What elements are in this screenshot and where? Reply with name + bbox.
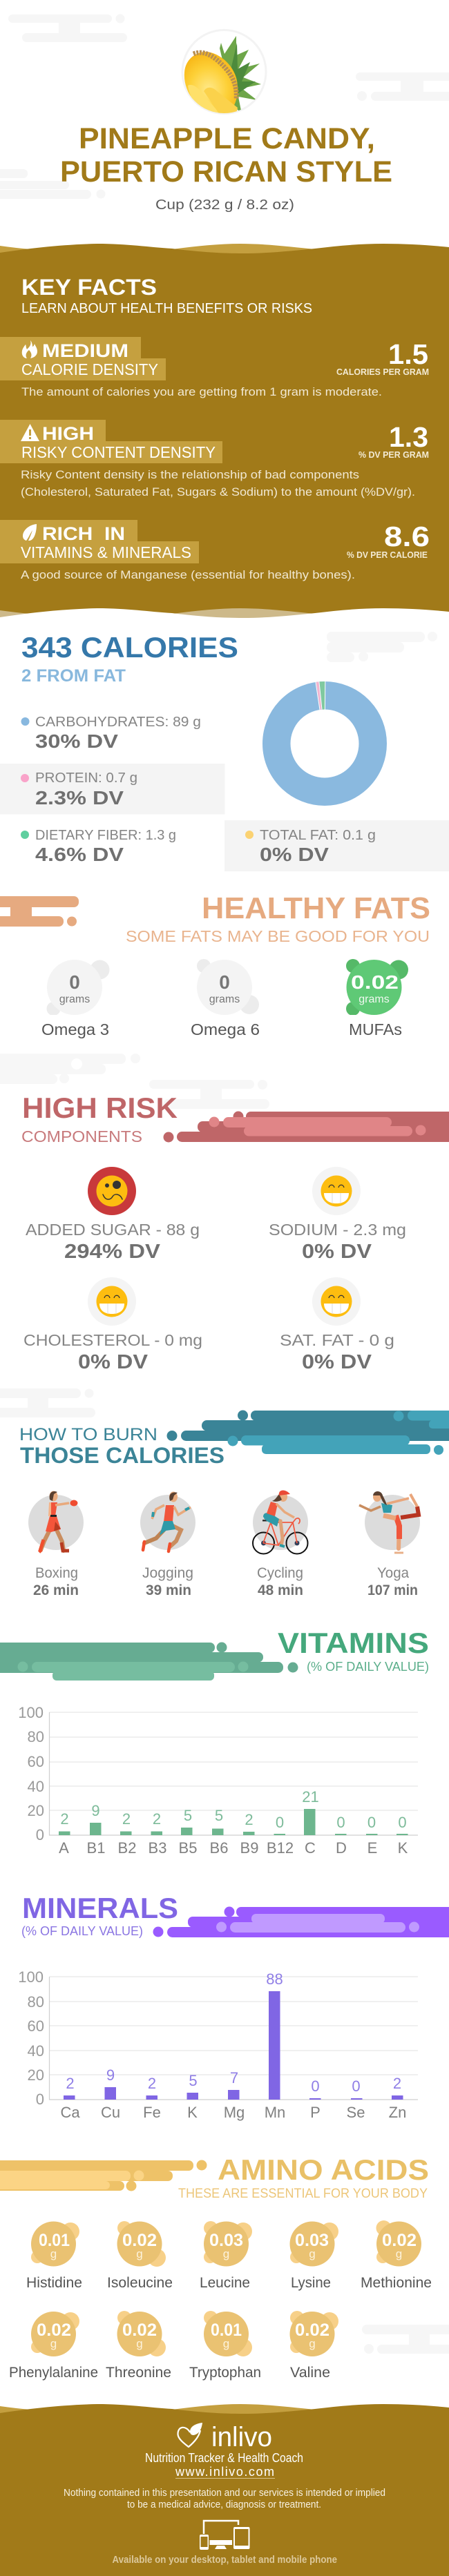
activity minutes: 48 min <box>258 1582 303 1598</box>
title: PINEAPPLE CANDY, <box>79 122 375 155</box>
activity: cycling <box>253 1490 308 1553</box>
risk: added sugar <box>26 1167 200 1263</box>
amino: leucine: Leucine <box>200 2275 250 2291</box>
icon: devices <box>200 2521 250 2550</box>
minerals subheading: (% OF DAILY VALUE) <box>21 1924 143 1938</box>
icon: flame <box>22 340 37 358</box>
bar chart: vitamins: A <box>59 1839 69 1857</box>
bar chart: minerals: 60 <box>28 2017 44 2035</box>
bar chart: minerals <box>18 1968 418 2121</box>
bar chart: vitamins: C <box>305 1839 316 1857</box>
fact: calorie density <box>0 337 429 398</box>
bar chart: vitamins: 9 <box>91 1802 100 1819</box>
risk: cholesterol <box>23 1277 202 1373</box>
footer <box>0 2404 449 2576</box>
bar chart: vitamins: B1 <box>87 1839 105 1857</box>
risk: sodium: 0% DV <box>302 1241 372 1263</box>
amino: isoleucine <box>107 2221 173 2291</box>
bar chart: minerals: 40 <box>28 2042 44 2060</box>
bar chart: minerals: 20 <box>28 2066 44 2084</box>
amino: lysine: Lysine <box>291 2275 331 2291</box>
bar chart: minerals: Fe <box>143 2104 161 2121</box>
bar chart: minerals: 5 <box>189 2072 198 2089</box>
burn heading <box>19 1425 224 1468</box>
panel: high risk <box>21 1092 449 1373</box>
legend: protein <box>0 764 225 815</box>
vitamins subheading: (% OF DAILY VALUE) <box>307 1660 429 1674</box>
disclaimer: Nothing contained in this presentation and our services is intended or implied <box>64 2487 385 2499</box>
bar chart: vitamins: 0 <box>398 1814 407 1831</box>
bar chart: vitamins: 0 <box>336 1814 345 1831</box>
bar chart: vitamins: B12 <box>267 1839 294 1857</box>
amino: phenylalanine: Phenylalanine <box>9 2365 98 2381</box>
amino: phenylalanine <box>9 2312 98 2381</box>
fact: vitamins and minerals <box>0 520 430 581</box>
fact: risky content density: % DV PER GRAM <box>359 449 429 460</box>
fact: risky content density: HIGH <box>42 423 94 444</box>
amino acids heading: AMINO ACIDS <box>218 2153 429 2186</box>
amino: methionine: 0.02 <box>382 2231 417 2250</box>
activity labels: Boxing <box>35 1565 78 1581</box>
bar chart: minerals: Mg <box>224 2104 245 2121</box>
amino: methionine <box>361 2220 432 2291</box>
legend: carbohydrates: CARBOHYDRATES: 89 g <box>35 715 201 730</box>
bar chart: minerals: 88 <box>266 1970 283 1988</box>
high risk heading: HIGH RISK <box>22 1092 178 1124</box>
tagline: Nutrition Tracker & Health Coach <box>145 2451 303 2465</box>
bar chart: vitamins: B2 <box>118 1839 136 1857</box>
minerals heading: MINERALS <box>22 1892 178 1924</box>
bar chart: minerals: Mn <box>265 2104 285 2121</box>
fact: vitamins and minerals: VITAMINS & MINERALS <box>21 543 191 561</box>
healthy fats heading: HEALTHY FATS <box>202 891 430 925</box>
fact: vitamins and minerals: 8.6 <box>384 521 430 552</box>
activity minutes: 39 min <box>146 1582 191 1598</box>
background clouds: high risk <box>0 1054 269 1109</box>
fact: risky content density: (Cholesterol, Saturated Fat, Sugars & Sodium) to the amount (%DV/gr). <box>21 485 415 498</box>
bar chart: vitamins: 5 <box>184 1807 192 1824</box>
legend: dietary fiber <box>21 828 176 865</box>
amino: valine: 0.02 <box>295 2321 329 2340</box>
amino: histidine: 0.01 <box>39 2231 70 2250</box>
activity: yoga <box>359 1491 420 1553</box>
bar chart: vitamins: 0 <box>276 1814 284 1831</box>
risk: cholesterol: CHOLESTEROL - 0 mg <box>23 1331 202 1349</box>
fact: vitamins and minerals: A good source of Manganese (essential for healthy bones). <box>21 568 355 581</box>
bar chart: minerals: P <box>310 2104 321 2121</box>
risk: sodium <box>269 1167 406 1263</box>
amino: threonine: 0.02 <box>122 2321 157 2340</box>
stat: omega 6 <box>197 959 259 1015</box>
bar chart: vitamins: 21 <box>302 1788 319 1805</box>
vitamins heading: VITAMINS <box>278 1627 429 1659</box>
amino: valine: g <box>309 2337 316 2350</box>
bar chart: minerals: 100 <box>18 1968 44 1986</box>
bar chart: minerals: 7 <box>230 2069 238 2086</box>
bar chart: vitamins: 40 <box>28 1778 44 1795</box>
bar chart: vitamins: 2 <box>153 1810 161 1828</box>
bar chart: vitamins: B3 <box>149 1839 166 1857</box>
decorative bar <box>0 1642 298 1681</box>
fact: risky content density <box>0 420 429 498</box>
legend: protein: 2.3% DV <box>35 787 124 808</box>
amino: threonine <box>106 2311 171 2381</box>
legend: carbohydrates: 30% DV <box>35 730 118 752</box>
bar chart: minerals: Ca <box>60 2104 80 2121</box>
amino: histidine <box>26 2222 82 2291</box>
bar chart: vitamins: 80 <box>28 1728 44 1745</box>
logo: inlivo: inlivo <box>211 2422 272 2452</box>
stat: omega 3: grams <box>59 994 90 1005</box>
bar chart: minerals: 80 <box>28 1993 44 2011</box>
panel: amino acids <box>0 2153 449 2381</box>
amino: tryptophan: g <box>223 2337 229 2350</box>
label: omega 6: Omega 6 <box>191 1020 260 1038</box>
risk: saturated fat: 0% DV <box>302 1351 372 1373</box>
legend: dietary fiber: DIETARY FIBER: 1.3 g <box>35 828 176 843</box>
decorative bar <box>163 1112 449 1142</box>
legend: total fat <box>224 820 449 871</box>
amino: threonine: g <box>136 2337 143 2350</box>
amino: phenylalanine: 0.02 <box>37 2321 71 2340</box>
stat: MUFAs: 0.02 <box>351 971 399 993</box>
activity minutes: 26 min <box>33 1582 79 1598</box>
fact: calorie density: CALORIE DENSITY <box>21 360 158 378</box>
amino: tryptophan: 0.01 <box>211 2321 242 2340</box>
amino: methionine: g <box>396 2247 402 2260</box>
high risk subheading: COMPONENTS <box>21 1127 142 1145</box>
risk: added sugar: 294% DV <box>64 1241 161 1263</box>
risk: added sugar: ADDED SUGAR - 88 g <box>26 1221 200 1239</box>
fact: calorie density: 1.5 <box>388 338 428 370</box>
stat: MUFAs: grams <box>359 994 390 1005</box>
key facts heading: KEY FACTS <box>21 275 157 300</box>
bar chart: vitamins: E <box>367 1839 377 1857</box>
key facts heading <box>21 275 312 316</box>
bar chart: minerals: 9 <box>106 2066 115 2084</box>
bar chart: vitamins: 100 <box>18 1704 44 1721</box>
amino: isoleucine: Isoleucine <box>107 2275 173 2291</box>
bar chart: vitamins: 0 <box>36 1826 44 1843</box>
bar chart: vitamins: 5 <box>215 1807 223 1824</box>
burn heading: HOW TO BURN <box>19 1425 157 1444</box>
amino: leucine <box>200 2221 252 2291</box>
title <box>60 122 392 188</box>
activity labels <box>35 1565 409 1581</box>
decorative bar <box>153 1907 449 1937</box>
bar chart: vitamins: 0 <box>367 1814 376 1831</box>
fact: vitamins and minerals: RICH IN <box>42 523 125 544</box>
amino: methionine: Methionine <box>361 2275 432 2291</box>
bar chart: minerals: 0 <box>311 2078 320 2095</box>
bar chart: vitamins: B6 <box>210 1839 228 1857</box>
calories heading: 343 CALORIES <box>21 631 238 664</box>
bar chart: vitamins: B5 <box>179 1839 197 1857</box>
risk: sodium: SODIUM - 2.3 mg <box>269 1221 406 1239</box>
legend: protein: PROTEIN: 0.7 g <box>35 771 137 786</box>
activity labels: Cycling <box>257 1565 303 1581</box>
amino: phenylalanine: g <box>50 2337 57 2350</box>
burn heading: THOSE CALORIES <box>20 1443 224 1468</box>
bar chart: vitamins: K <box>398 1839 408 1857</box>
bar chart: minerals: 2 <box>393 2075 401 2092</box>
amino: lysine: 0.03 <box>295 2231 329 2250</box>
bar chart: minerals: 2 <box>66 2075 75 2092</box>
bar chart: minerals: 0 <box>36 2091 44 2108</box>
fact: calorie density: The amount of calories you are getting from 1 gram is moderate. <box>21 385 382 398</box>
disclaimer: to be a medical advice, diagnosis or treatment. <box>127 2499 321 2510</box>
activity minutes: 107 min <box>367 1582 418 1598</box>
fact: risky content density: 1.3 <box>389 421 428 453</box>
panel: vitamins <box>0 1627 429 1857</box>
healthy fats subheading: SOME FATS MAY BE GOOD FOR YOU <box>126 927 430 945</box>
panel: how to burn those calories <box>0 1388 449 1598</box>
panel: minerals <box>18 1892 449 2121</box>
risk: cholesterol: 0% DV <box>78 1351 149 1373</box>
amino acids subheading: THESE ARE ESSENTIAL FOR YOUR BODY <box>178 2187 428 2201</box>
activity labels: Jogging <box>142 1565 193 1581</box>
amino: histidine: Histidine <box>26 2275 82 2291</box>
legend: carbohydrates <box>21 715 201 752</box>
amino: valine <box>290 2311 338 2381</box>
bar chart: minerals: 0 <box>352 2078 361 2095</box>
donut chart <box>276 681 373 792</box>
bar chart: vitamins: 60 <box>28 1753 44 1770</box>
bar chart: minerals: Cu <box>101 2104 120 2121</box>
activity: boxing <box>28 1491 84 1552</box>
bar chart: minerals: Zn <box>389 2104 406 2121</box>
amino: isoleucine: 0.02 <box>122 2231 157 2250</box>
amino: leucine: g <box>223 2247 229 2260</box>
legend: total fat: TOTAL FAT: 0.1 g <box>260 828 376 843</box>
bar chart: vitamins: 2 <box>245 1811 254 1828</box>
decorative bar <box>0 2160 207 2191</box>
stat: MUFAs <box>346 959 408 1016</box>
stat: omega 6: 0 <box>219 971 230 993</box>
panel: healthy fats <box>0 891 430 1038</box>
serving size: Cup (232 g / 8.2 oz) <box>155 197 294 213</box>
bar chart: vitamins: 2 <box>60 1810 69 1828</box>
icon: warning triangle <box>21 424 39 441</box>
fact: calorie density: MEDIUM <box>42 340 128 361</box>
legend: dietary fiber: 4.6% DV <box>35 844 124 865</box>
bar chart: vitamins: D <box>336 1839 347 1857</box>
availability note: Available on your desktop, tablet and mobile phone <box>112 2554 337 2566</box>
fact: risky content density: RISKY CONTENT DENSITY <box>21 443 216 461</box>
bar chart: minerals: Se <box>347 2104 365 2121</box>
amino: lysine: g <box>309 2247 316 2260</box>
fact: calorie density: CALORIES PER GRAM <box>336 367 429 377</box>
amino: threonine: Threonine <box>106 2365 171 2381</box>
decorative bar <box>167 1410 449 1455</box>
legend: total fat: 0% DV <box>260 844 329 865</box>
amino: tryptophan <box>189 2311 261 2381</box>
activity: jogging <box>140 1491 195 1551</box>
fact: risky content density: Risky Content density is the relationship of bad components <box>21 468 359 481</box>
amino: tryptophan: Tryptophan <box>189 2365 261 2381</box>
bar chart: vitamins <box>18 1704 418 1857</box>
bar chart: vitamins: 2 <box>122 1810 131 1828</box>
amino: histidine: g <box>50 2247 57 2260</box>
bar chart: vitamins: 20 <box>28 1802 44 1819</box>
amino: valine: Valine <box>290 2365 330 2381</box>
decorative bar <box>0 896 79 927</box>
panel: calories <box>0 631 449 871</box>
bar chart: minerals: 2 <box>148 2075 156 2092</box>
bar chart: minerals: K <box>187 2104 198 2121</box>
fact: vitamins and minerals: % DV PER CALORIE <box>347 550 428 560</box>
risk: saturated fat <box>280 1277 394 1373</box>
amino: isoleucine: g <box>136 2247 143 2260</box>
calories from fat: 2 FROM FAT <box>21 666 126 686</box>
activity labels: Yoga <box>377 1565 409 1581</box>
risk: saturated fat: SAT. FAT - 0 g <box>280 1331 394 1349</box>
stat: omega 3 <box>47 960 109 1016</box>
activity minutes <box>33 1582 418 1598</box>
panel: key facts <box>0 244 449 621</box>
header image: pineapple <box>182 30 266 115</box>
stat: omega 6: grams <box>209 994 240 1005</box>
disclaimer <box>64 2487 385 2510</box>
bar chart: vitamins: B9 <box>240 1839 258 1857</box>
stat: omega 3: 0 <box>69 971 80 993</box>
key facts heading: LEARN ABOUT HEALTH BENEFITS OR RISKS <box>21 301 312 316</box>
amino: leucine: 0.03 <box>209 2231 243 2250</box>
amino: lysine <box>290 2222 338 2291</box>
title: PUERTO RICAN STYLE <box>60 155 392 188</box>
label: MUFAs: MUFAs <box>349 1020 402 1038</box>
logo: inlivo <box>178 2422 272 2452</box>
background clouds: header <box>0 14 449 199</box>
icon: leaf <box>23 524 37 541</box>
label: omega 3: Omega 3 <box>41 1020 109 1038</box>
website: www.inlivo.com <box>175 2465 274 2479</box>
